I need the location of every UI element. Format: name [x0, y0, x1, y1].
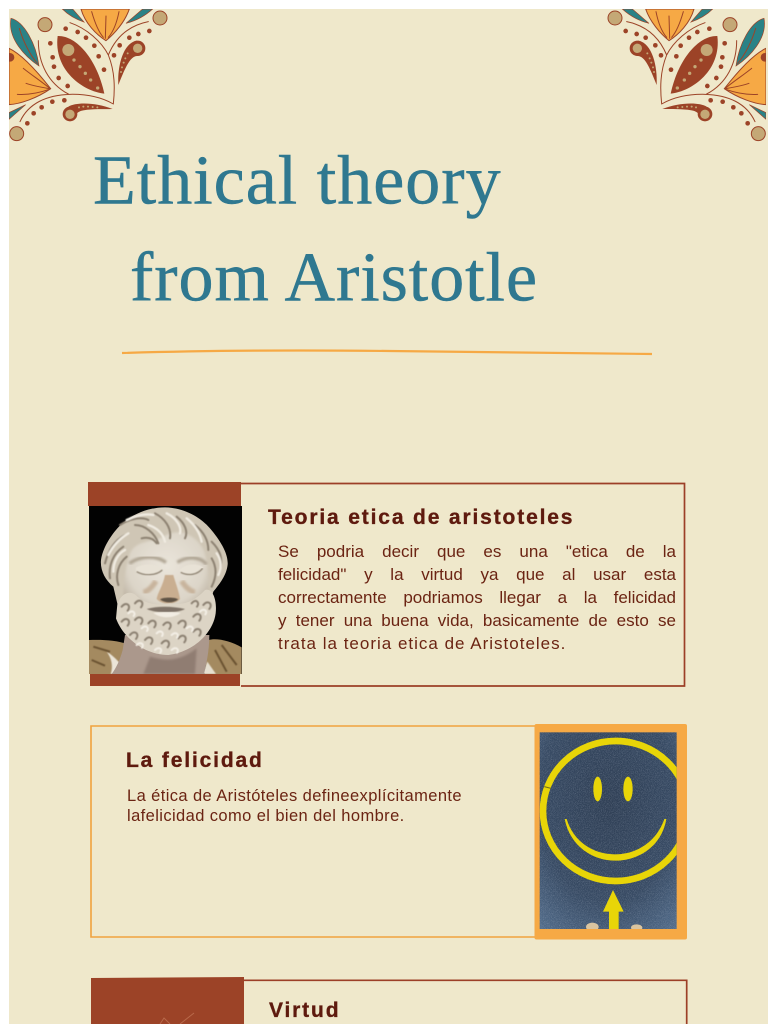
mouth	[147, 607, 185, 612]
body text: lafelicidad como el bien del hombre.	[127, 807, 405, 825]
panel border	[241, 482, 686, 687]
title: Ethical theory	[93, 142, 502, 220]
hair strands	[105, 513, 221, 587]
body text: La ética de Aristóteles defineexplícitamente	[127, 787, 462, 805]
body text: correctamente podriamos llegar a la felicidad	[278, 588, 676, 607]
panel border	[90, 725, 535, 938]
beard curls	[122, 601, 211, 653]
photo: bust of Aristotle	[88, 482, 242, 686]
neck	[112, 635, 209, 674]
heading: La felicidad	[126, 749, 264, 772]
body text	[127, 787, 462, 825]
title underline	[122, 349, 652, 356]
nose and cheeks	[143, 581, 195, 592]
decorative ornament: top right corner	[608, 9, 766, 142]
beard	[116, 590, 216, 655]
panel: virtud	[91, 977, 688, 1024]
brows and eyes	[129, 557, 207, 564]
title	[93, 142, 538, 317]
heading: Teoria etica de aristoteles	[268, 506, 574, 529]
panel border and image block	[91, 977, 688, 1024]
body text: Se podria decir que es una "etica de la	[278, 542, 676, 561]
face	[124, 532, 208, 604]
hair	[101, 507, 228, 615]
panel: la felicidad	[90, 724, 687, 940]
body text: y tener una buena vida, basicamente de esto se	[278, 611, 676, 630]
body text	[278, 542, 676, 653]
body text: trata la teoria etica de Aristoteles.	[278, 634, 566, 653]
title: from Aristotle	[130, 240, 538, 317]
decorative ornament: top left corner	[9, 9, 168, 142]
panel: teoria etica de aristoteles	[88, 482, 686, 687]
photo: smiley face painted on asphalt	[534, 724, 687, 940]
body text: felicidad" y la virtud ya que al usar esta	[278, 565, 676, 584]
drapery	[89, 640, 125, 674]
heading: Virtud	[269, 999, 340, 1022]
